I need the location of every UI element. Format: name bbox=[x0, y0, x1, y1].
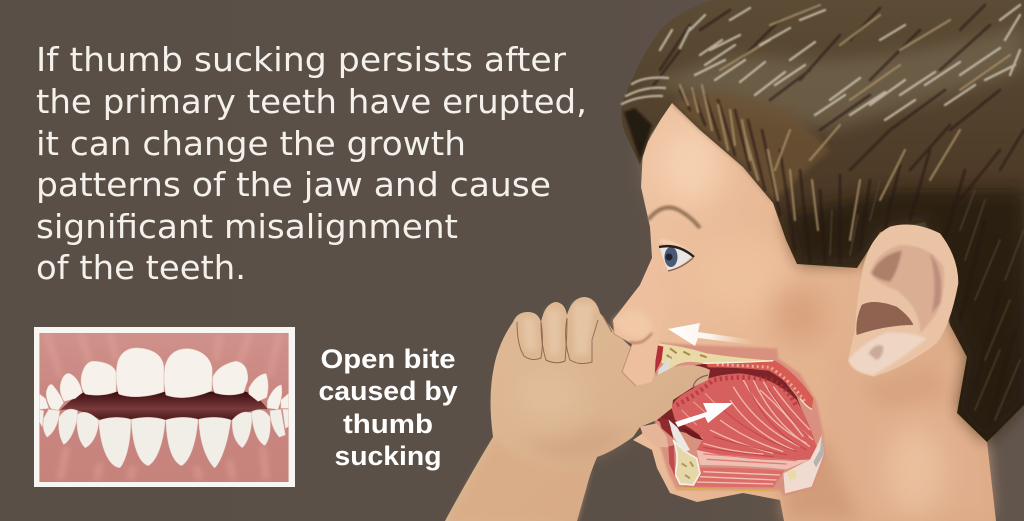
mandible bone bbox=[673, 440, 700, 485]
main text: it can change the growth bbox=[36, 124, 466, 163]
fringe tone bbox=[672, 90, 830, 200]
mouth opening bbox=[60, 392, 268, 420]
caption: open bite bbox=[318, 344, 458, 471]
caption: open bite: caused by bbox=[318, 376, 458, 406]
muscles of mouth floor bbox=[697, 450, 810, 469]
finger outlines bbox=[517, 316, 612, 364]
ear bbox=[848, 224, 958, 377]
photo: open bite teeth bbox=[34, 327, 295, 487]
nose and upper lip over the hand bbox=[613, 258, 665, 386]
caption: open bite: thumb bbox=[343, 409, 433, 439]
upper teeth bbox=[39, 348, 289, 410]
lower teeth bbox=[39, 409, 289, 468]
main text bbox=[36, 40, 587, 287]
hair strands tan bbox=[680, 5, 1010, 240]
lower lip bbox=[658, 417, 673, 438]
palate bbox=[655, 343, 813, 409]
arrow: tongue pushed back bbox=[675, 403, 733, 427]
dark interior bbox=[657, 363, 815, 462]
hair strands highlight bbox=[622, 5, 1020, 120]
ear upper hollow bbox=[870, 245, 944, 333]
pink cut edge bbox=[655, 343, 825, 496]
illustration: boy in profile sucking thumb bbox=[445, 0, 1024, 521]
hair bbox=[621, 0, 1024, 442]
forelock shadow bbox=[624, 108, 652, 160]
arrow: upper jaw pushed forward bbox=[668, 323, 755, 346]
hair strands lower bbox=[830, 180, 1024, 420]
sublingual pouch bbox=[682, 428, 703, 440]
lower tooth bbox=[668, 419, 690, 452]
face and neck bbox=[613, 100, 996, 521]
main text: If thumb sucking persists after bbox=[36, 40, 566, 79]
hand and arm with thumb bbox=[445, 297, 710, 521]
dark lower hair shading bbox=[785, 190, 1024, 440]
caption: open bite: Open bite bbox=[320, 344, 456, 374]
pale neck tissue bbox=[783, 435, 824, 493]
main text: significant misalignment bbox=[36, 207, 458, 246]
upper tooth bbox=[657, 357, 671, 381]
thumb nail bbox=[693, 375, 708, 388]
eye and eyebrow bbox=[648, 208, 700, 271]
tongue striations bbox=[677, 377, 813, 457]
tongue bbox=[672, 373, 817, 460]
main text: the primary teeth have erupted, bbox=[36, 82, 587, 121]
ear outer bbox=[848, 224, 958, 377]
neck shading bbox=[820, 345, 990, 515]
main text: of the teeth. bbox=[36, 248, 246, 287]
hair strands dark bbox=[622, 5, 1024, 420]
ear lobe bbox=[848, 333, 927, 375]
mouth cross-section bbox=[640, 343, 825, 496]
ear concha bbox=[856, 302, 913, 335]
main text: patterns of the jaw and cause bbox=[36, 165, 551, 204]
fingers highlight bbox=[522, 304, 594, 355]
caption: open bite: sucking bbox=[334, 441, 442, 471]
lighter crown band bbox=[650, 25, 1024, 130]
